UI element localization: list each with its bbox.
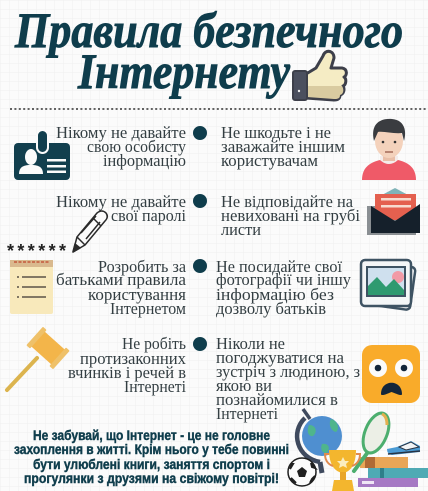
closing message: Не забувай, що Інтернет - це не головне <box>33 427 270 443</box>
text block: nothing illegal: протизаконних <box>80 349 187 368</box>
icon: soccer ball <box>288 458 316 486</box>
icon: envelope <box>367 188 420 235</box>
text block: do not reply to rude letters: невиховані на грубі <box>221 206 360 225</box>
icon: man <box>362 119 416 180</box>
text block: no passwords: Нікому не давайте <box>56 192 186 211</box>
icon: tennis racket <box>354 409 394 471</box>
text block: no personal information: Нікому не давайте <box>56 123 186 142</box>
closing message: захоплення в житті. Крім нього у тебе повинні <box>14 441 289 457</box>
icon: id card <box>14 130 70 180</box>
text block: do not send photos: фотографії чи іншу <box>216 270 352 289</box>
password asterisks: ****** <box>7 241 66 261</box>
text block: rules with parents: Інтернетом <box>110 299 187 318</box>
text block: never meet strangers: Інтернеті <box>216 404 278 423</box>
text block: do not harm others <box>221 123 346 170</box>
text block: do not send photos <box>216 257 352 318</box>
text block: never meet strangers: якою ви <box>216 376 272 395</box>
icon: books <box>358 457 428 487</box>
text block: do not harm others: Не шкодьте і не <box>221 123 331 142</box>
text block: no passwords <box>56 192 186 225</box>
text block: nothing illegal: Не робіть <box>122 334 186 353</box>
icon: pencil <box>73 211 107 252</box>
text block: never meet strangers: Ніколи не <box>216 334 285 353</box>
text block: nothing illegal: Інтернеті <box>124 377 186 396</box>
text block: rules with parents <box>56 257 187 318</box>
text block: rules with parents: користування <box>88 285 186 304</box>
text block: never meet strangers: познайомилися в <box>216 390 338 409</box>
text block: no personal information: інформацію <box>103 151 186 170</box>
closing message: бути улюблені книги, заняття спортом і <box>33 456 270 472</box>
text block: do not send photos: інформацію без <box>216 285 334 304</box>
text block: do not send photos: Не посидайте свої <box>216 257 342 276</box>
text block: rules with parents: Розробить за <box>98 257 187 276</box>
text block: no passwords: свої паролі <box>111 206 186 225</box>
icon: photos <box>361 260 416 310</box>
closing message: прогулянки з друзями на свіжому повітрі! <box>24 470 279 486</box>
icon: globe <box>297 409 342 473</box>
title <box>14 2 403 99</box>
title: Інтернету <box>77 43 291 99</box>
icon: gavel <box>7 327 70 390</box>
icon: shocked emoji <box>362 345 420 403</box>
text block: no personal information: свою особисту <box>87 137 187 156</box>
text block: do not reply to rude letters: Не відповідайте на <box>221 192 354 211</box>
text block: never meet strangers: зустріч з людиною, з <box>216 362 360 381</box>
bullets <box>193 126 207 351</box>
closing message <box>14 427 289 486</box>
text block: do not harm others: заважайте іншим <box>221 137 346 156</box>
text block: do not reply to rude letters <box>221 192 360 239</box>
text block: nothing illegal <box>68 334 187 396</box>
icon: thumbs up <box>293 51 346 100</box>
text block: never meet strangers <box>216 334 360 423</box>
icon: notepad <box>10 260 53 314</box>
text block: do not reply to rude letters: листи <box>221 220 261 239</box>
text block: do not send photos: дозволу батьків <box>216 299 326 318</box>
icon: sneaker <box>387 441 420 455</box>
text block: nothing illegal: вчинків і речей в <box>68 363 186 382</box>
text block: rules with parents: батьками правила <box>56 270 187 289</box>
text block: no personal information <box>56 123 187 170</box>
icon: trophy <box>325 450 360 491</box>
text block: do not harm others: користувачам <box>221 151 319 170</box>
text block: never meet strangers: погоджуватися на <box>216 348 345 367</box>
